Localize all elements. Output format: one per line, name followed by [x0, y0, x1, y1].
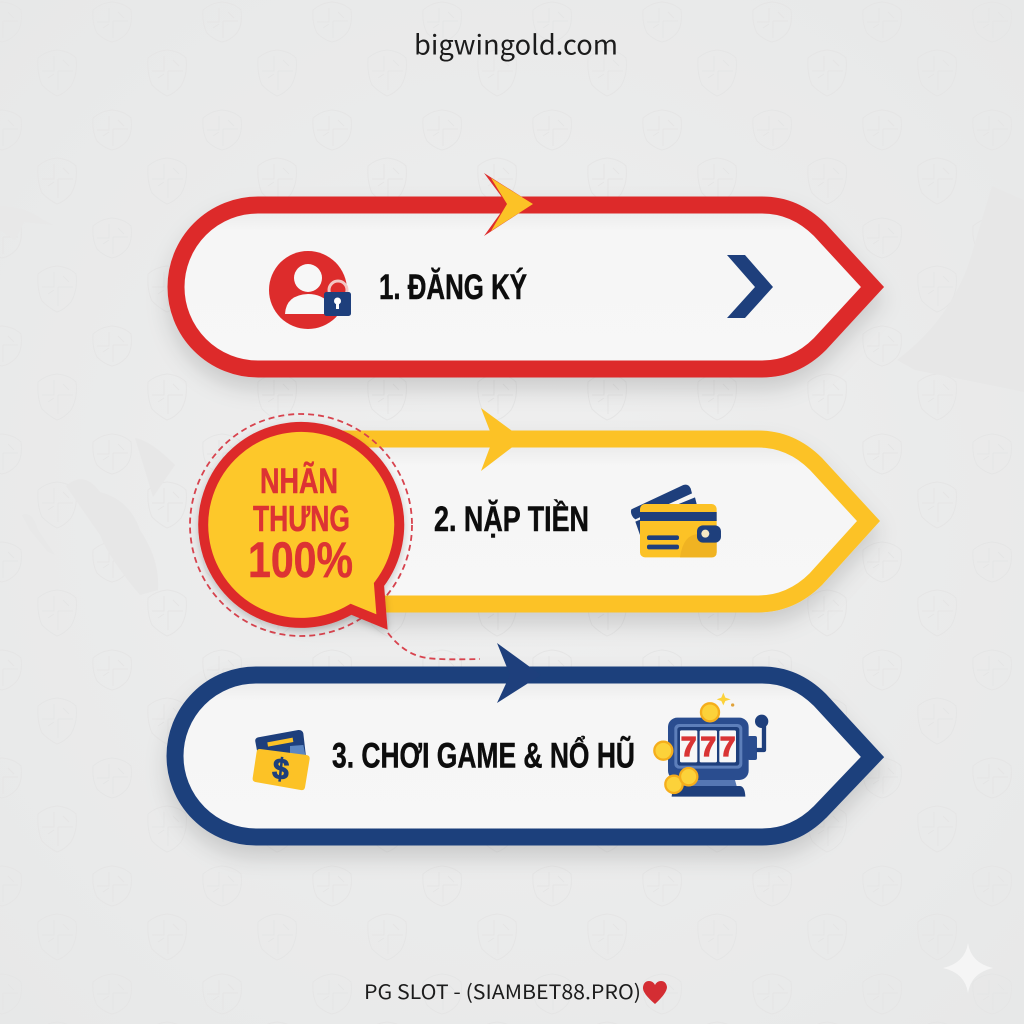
step 3 label: 3. CHƠI GAME & NỔ HŨ	[332, 736, 635, 776]
panel: step 1 register	[176, 173, 872, 369]
icon: slot machine: 7	[720, 731, 735, 762]
dashed connector	[388, 633, 480, 659]
icon: sparkle	[943, 943, 993, 993]
icon: slot machine: 7	[701, 731, 716, 762]
speech bubble shape	[203, 427, 399, 623]
arrow: yellow top arrowhead	[481, 408, 523, 471]
panel shape: navy arrow pill	[175, 675, 872, 837]
bubble text: NHÃN	[260, 462, 338, 501]
panel: step 2 deposit	[300, 408, 868, 604]
arrow: red and yellow top arrowhead	[484, 173, 533, 236]
bubble text: THƯNG	[253, 498, 350, 539]
footer text: PG SLOT - (SIAMBET88.PRO)	[364, 976, 641, 1005]
icon: money card	[253, 730, 310, 790]
icon: navy chevron	[727, 255, 773, 318]
panel shape: yellow arrow pill	[300, 439, 868, 604]
dashed ring	[190, 414, 412, 636]
icon: slot machine	[654, 693, 768, 797]
callout: bonus speech bubble	[190, 414, 480, 659]
step 1 label: 1. ĐĂNG KÝ	[379, 267, 527, 307]
icon: money card: $	[271, 752, 291, 787]
step 2 label: 2. NẶP TIỀN	[434, 499, 589, 539]
icon: user with padlock	[269, 251, 351, 329]
icon: wallet and card	[631, 485, 721, 557]
bubble text	[248, 462, 353, 588]
panel shape: red arrow pill	[176, 205, 872, 369]
icon: heart	[643, 981, 667, 1004]
bubble text: 100%	[248, 532, 353, 588]
icon: slot machine: 7	[681, 731, 696, 762]
panel: step 3 play	[175, 643, 872, 837]
arrow: navy top arrowhead	[497, 643, 541, 703]
site name heading: bigwingold.com	[414, 24, 618, 62]
